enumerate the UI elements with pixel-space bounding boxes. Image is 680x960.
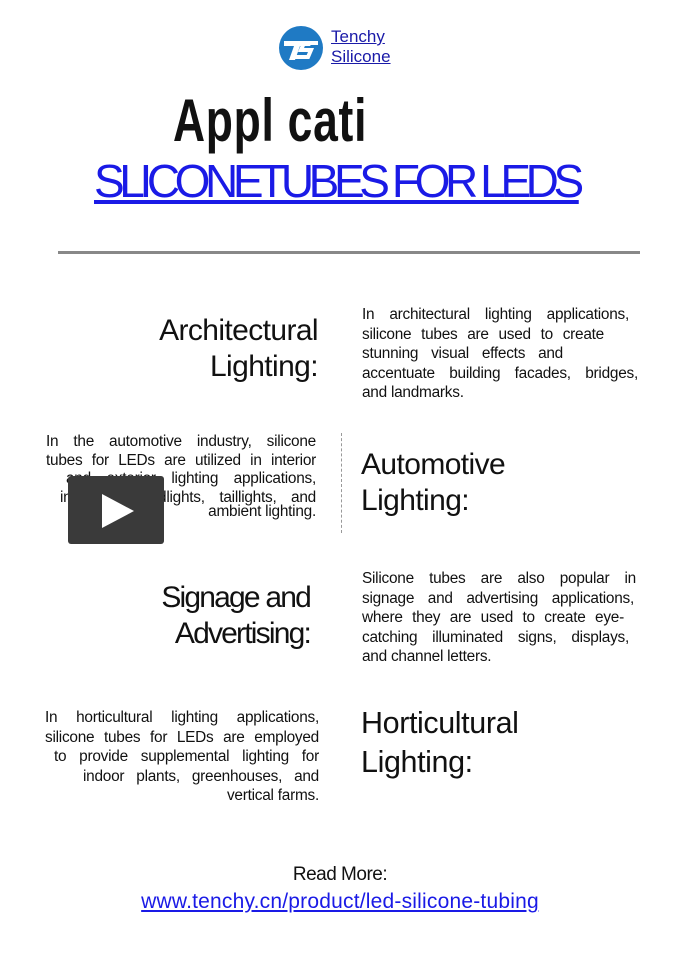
text: horticultural: vertical farms. bbox=[227, 787, 319, 804]
text: architectural: and landmarks. bbox=[362, 384, 464, 401]
text: signage bbox=[362, 570, 636, 665]
icon: play button bbox=[68, 476, 164, 544]
text: signage: signage and advertising applications, bbox=[362, 590, 634, 607]
text: horticultural: In horticultural lighting applications, bbox=[45, 709, 319, 726]
heading: horticultural: Horticultural bbox=[361, 706, 519, 740]
icon: logo circle bbox=[279, 26, 323, 70]
text: architectural: In architectural lighting applications, bbox=[362, 306, 629, 323]
text: architectural: stunning visual effects and bbox=[362, 345, 563, 362]
heading: architectural: Lighting: bbox=[210, 350, 318, 383]
text: automotive: In the automotive industry, silicone bbox=[46, 433, 316, 450]
text: horticultural: to provide supplemental lighting for bbox=[54, 748, 319, 765]
heading: signage bbox=[161, 581, 310, 650]
link: www.tenchy.cn/product/led-silicone-tubing bbox=[141, 890, 539, 913]
text: automotive: tubes for LEDs are utilized in interior bbox=[46, 452, 316, 468]
logo text bbox=[331, 27, 391, 66]
text: signage: Silicone tubes are also popular in bbox=[362, 570, 636, 587]
logo bbox=[279, 26, 391, 70]
heading: signage: Signage and bbox=[161, 581, 310, 614]
subtitle: SLICONETUBES FOR LEDS bbox=[94, 155, 579, 207]
text: horticultural: indoor plants, greenhouses, and bbox=[83, 768, 319, 785]
heading: automotive: Automotive bbox=[361, 448, 505, 481]
text: automotive: ambient lighting. bbox=[208, 503, 316, 520]
title: Appl cati bbox=[173, 87, 367, 154]
heading: architectural bbox=[159, 314, 318, 383]
text: architectural: accentuate building facades, bridges, bbox=[362, 365, 638, 382]
heading: automotive: Lighting: bbox=[361, 484, 469, 517]
text: automotive bbox=[46, 433, 316, 520]
text: signage: where they are used to create eye- bbox=[362, 609, 624, 626]
heading: signage: Advertising: bbox=[175, 617, 310, 650]
text: architectural: silicone tubes are used to create bbox=[362, 326, 604, 343]
heading: horticultural: Lighting: bbox=[361, 745, 473, 779]
text: horticultural bbox=[45, 709, 319, 804]
text: signage: catching illuminated signs, displays, bbox=[362, 629, 629, 646]
heading: horticultural bbox=[361, 706, 519, 779]
heading: architectural: Architectural bbox=[159, 314, 318, 347]
logo text: Tenchy bbox=[331, 27, 385, 46]
heading: automotive bbox=[361, 448, 505, 517]
text: automotive: including headlights, taillights, and bbox=[60, 488, 316, 506]
logo text: Silicone bbox=[331, 47, 391, 66]
read more: Read More: bbox=[293, 864, 387, 885]
text: horticultural: silicone tubes for LEDs are employed bbox=[45, 729, 319, 746]
text: signage: and channel letters. bbox=[362, 648, 491, 665]
text: architectural bbox=[362, 306, 638, 401]
read more bbox=[141, 864, 539, 913]
text: automotive: and exterior lighting applications, bbox=[66, 470, 316, 487]
